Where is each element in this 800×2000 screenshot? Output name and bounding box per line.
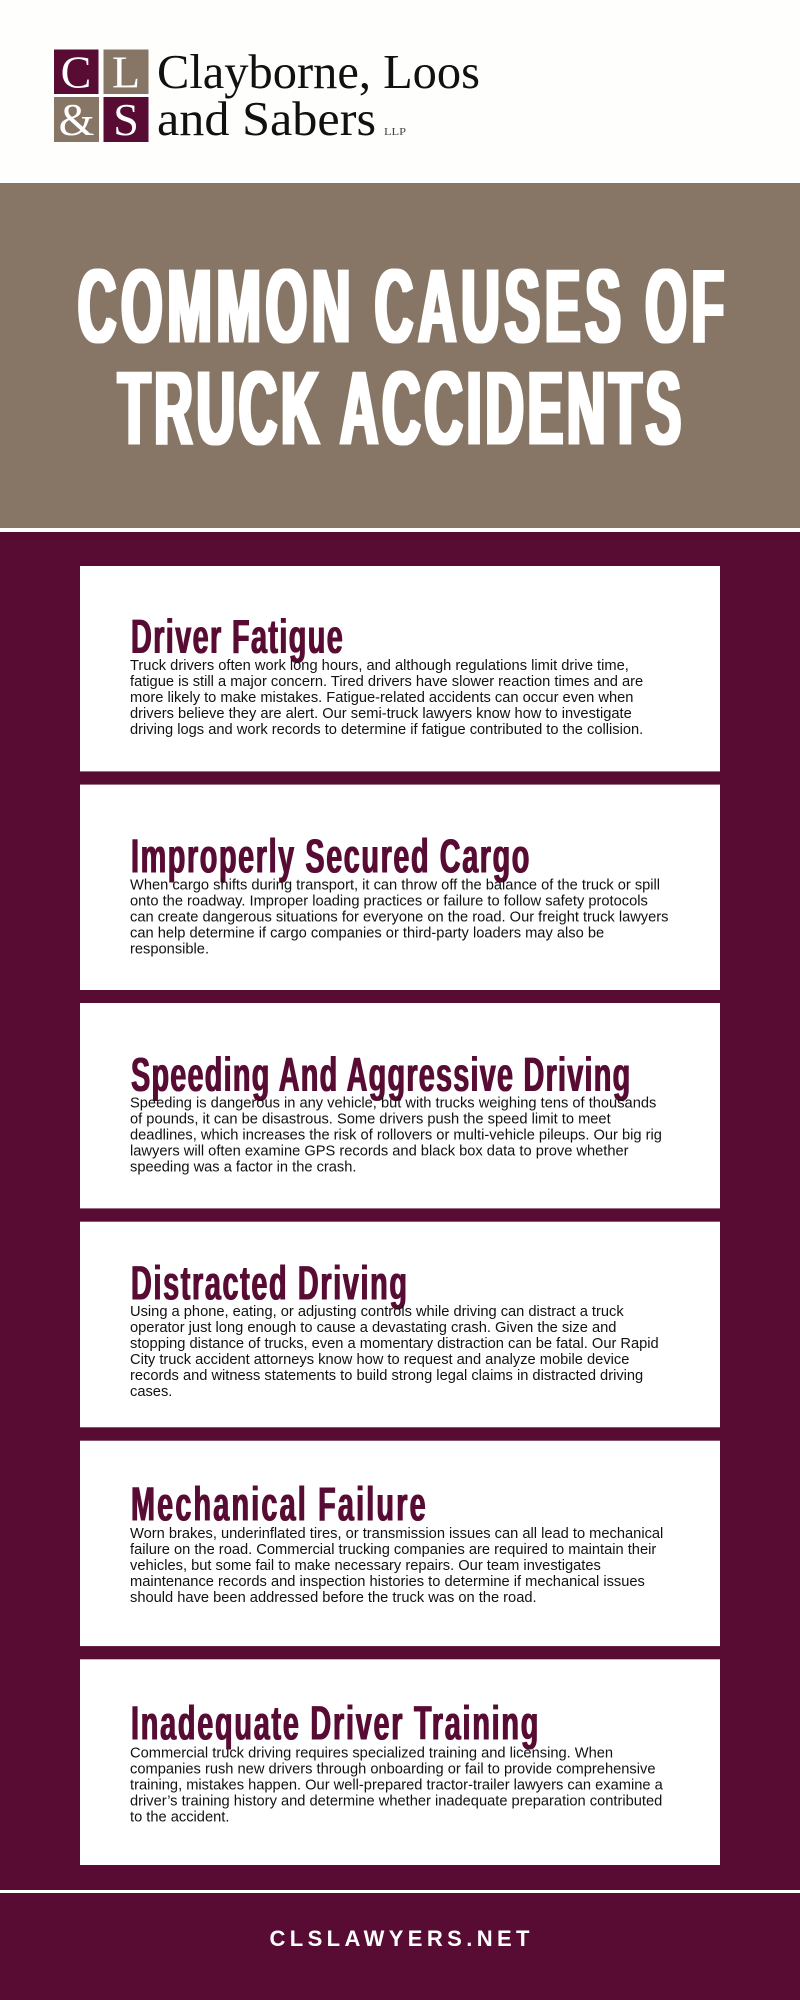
text: improperly secured cargo: onto the roadway. Improper loading practices or failure to follow safety protocols [130, 893, 648, 909]
text: distracted driving: cases. [130, 1384, 172, 1400]
text: speeding and aggressive driving: Speeding is dangerous in any vehicle, but with trucks weighing tens of thousands [130, 1096, 656, 1112]
logo: monogram squares: S [113, 94, 139, 145]
panel: distracted driving [80, 1222, 720, 1427]
logo: firm name [157, 44, 480, 146]
text: inadequate driver training: Commercial truck driving requires specialized training and licensing. When [130, 1746, 613, 1762]
text: improperly secured cargo: responsible. [130, 941, 209, 957]
text: distracted driving: records and witness statements to build strong legal claims in distracted driving [130, 1368, 643, 1384]
text: improperly secured cargo: can help determine if cargo companies or third-party loaders may also be [130, 925, 604, 941]
panel: speeding and aggressive driving [80, 1003, 720, 1208]
text: driver fatigue: driving logs and work records to determine if fatigue contributed to the collision. [130, 722, 643, 738]
panel: mechanical failure [80, 1441, 720, 1646]
text: improperly secured cargo: When cargo shifts during transport, it can throw off the balance of the truck or spill [130, 877, 660, 893]
logo: monogram squares [54, 46, 148, 145]
title text: TRUCK ACCIDENTS [118, 349, 681, 467]
logo: monogram squares: C [61, 46, 91, 98]
panel: inadequate driver training [80, 1659, 720, 1865]
logo: firm name: and Sabers [157, 91, 376, 146]
text: inadequate driver training: to the accident. [130, 1810, 229, 1826]
title text [78, 247, 724, 467]
header: logo band [0, 0, 800, 183]
panel: improperly secured cargo [80, 785, 720, 990]
title banner [0, 183, 800, 528]
text: driver fatigue: Truck drivers often work long hours, and although regulations limit drive time, [130, 658, 629, 674]
logo: firm name: Clayborne, Loos [157, 44, 480, 99]
panel: driver fatigue [80, 566, 720, 771]
text: mechanical failure: vehicles, but some fail to make necessary repairs. Our team investigates [130, 1558, 601, 1574]
text: speeding and aggressive driving: of pounds, it can be disastrous. Some drivers push the speed limit to meet [130, 1112, 611, 1128]
text: inadequate driver training: training, mistakes happen. Our well-prepared tractor-trailer lawyers can examine a [130, 1778, 664, 1794]
text: distracted driving: Using a phone, eating, or adjusting controls while driving can distract a truck [130, 1304, 624, 1320]
heading: speeding and aggressive driving: Speeding And Aggressive Driving [131, 1049, 630, 1102]
heading: mechanical failure: Mechanical Failure [131, 1478, 426, 1532]
footer divider [0, 1890, 800, 1893]
text: inadequate driver training: driver’s training history and determine whether inadequate preparation contributed [130, 1794, 662, 1810]
text: improperly secured cargo: can create dangerous situations for everyone on the road. Our freight truck lawyers [130, 909, 668, 925]
text: distracted driving: City truck accident attorneys know how to request and analyze mobile device [130, 1352, 629, 1368]
heading: improperly secured cargo: Improperly Secured Cargo [131, 830, 529, 884]
heading: driver fatigue: Driver Fatigue [131, 611, 343, 664]
logo: firm name: LLP [384, 126, 406, 138]
heading: inadequate driver training: Inadequate Driver Training [131, 1697, 538, 1750]
text: mechanical failure: should have been addressed before the truck was on the road. [130, 1590, 537, 1606]
footer: website: CLSLAWYERS.NET [270, 1926, 530, 1951]
logo: monogram squares: & [59, 94, 94, 145]
text: driver fatigue: more likely to make mistakes. Fatigue-related accidents can occur even when [130, 690, 633, 706]
text: speeding and aggressive driving: lawyers will often examine GPS records and black box data to prove whether [130, 1144, 629, 1160]
text: mechanical failure: failure on the road. Commercial trucking companies are required to maintain their [130, 1542, 656, 1558]
text: inadequate driver training: companies rush new drivers through onboarding or fail to provide comprehensive [130, 1762, 655, 1778]
text: distracted driving: stopping distance of trucks, even a momentary distraction can be fatal. Our Rapid [130, 1336, 659, 1352]
text: distracted driving: operator just long enough to cause a devastating crash. Given the size and [130, 1320, 616, 1336]
text: driver fatigue: fatigue is still a major concern. Tired drivers have slower reaction times and are [130, 674, 643, 690]
text: speeding and aggressive driving: speeding was a factor in the crash. [130, 1160, 356, 1176]
heading: distracted driving: Distracted Driving [131, 1257, 407, 1310]
text: speeding and aggressive driving: deadlines, which increases the risk of rollovers or multi-vehicle pileups. Our big rig [130, 1128, 662, 1144]
text: mechanical failure: Worn brakes, underinflated tires, or transmission issues can all lead to mechanical [130, 1526, 663, 1542]
divider and maroon background [0, 528, 800, 2000]
title text: COMMON CAUSES OF [78, 247, 724, 365]
logo: monogram squares: L [112, 46, 140, 98]
text: mechanical failure: maintenance records and inspection histories to determine if mechanical issues [130, 1574, 645, 1590]
text: driver fatigue: drivers believe they are alert. Our semi-truck lawyers know how to investigate [130, 706, 632, 722]
